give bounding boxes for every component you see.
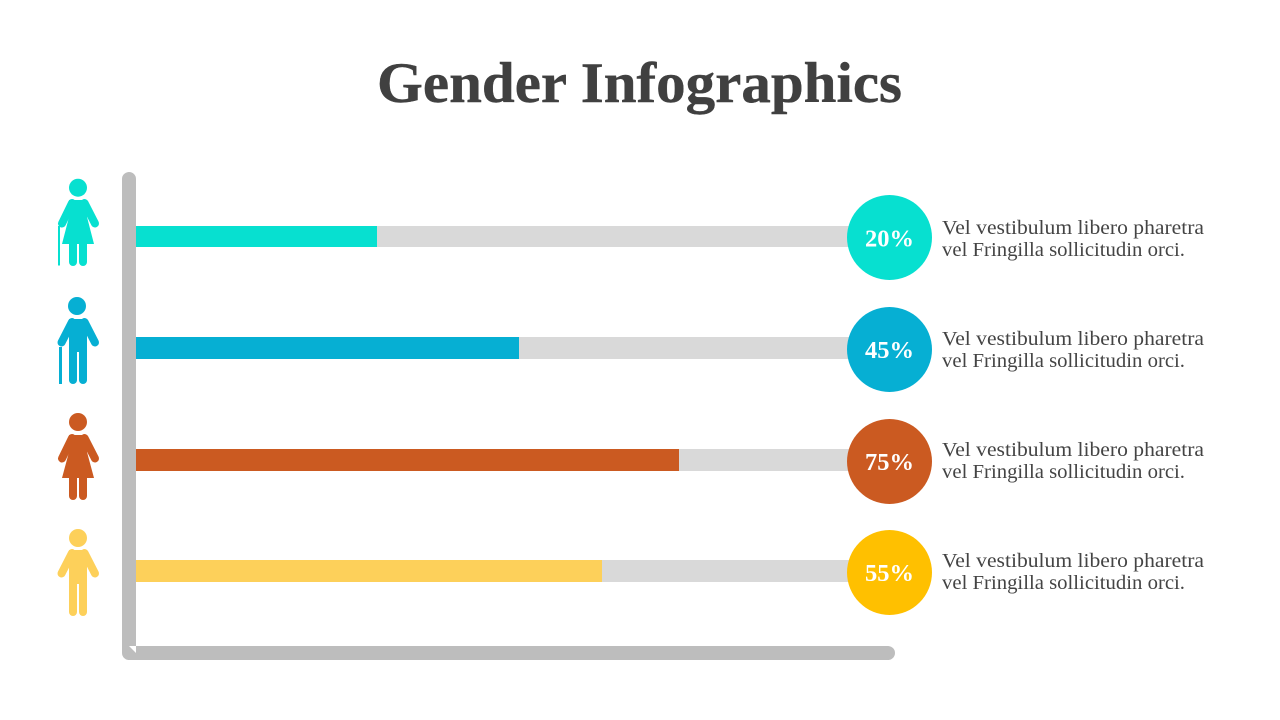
bar track: [136, 226, 850, 247]
description: Vel vestibulum libero pharetra: [942, 550, 1204, 572]
icon: elderly woman: [58, 179, 95, 266]
description: Vel vestibulum libero pharetra: [942, 217, 1204, 239]
percent circle: [847, 195, 932, 280]
percent label: 75%: [865, 450, 914, 476]
percent label: 20%: [865, 226, 914, 252]
row 2: elderly man 45%: [59, 297, 1204, 392]
row 4: man 55%: [62, 529, 1204, 616]
bar value: [136, 560, 602, 582]
bar track: [136, 337, 850, 359]
bar track: [136, 560, 850, 582]
percent label: 45%: [865, 338, 914, 364]
description: Vel vestibulum libero pharetra: [942, 439, 1204, 461]
bar track: [136, 449, 850, 471]
icon: man: [62, 529, 95, 616]
bar value: [136, 337, 519, 359]
row 3: woman 75%: [62, 413, 1204, 504]
description: vel Fringilla sollicitudin orci.: [942, 572, 1185, 594]
bar value: [136, 449, 679, 471]
description: Vel vestibulum libero pharetra: [942, 328, 1204, 350]
icon: woman: [62, 413, 95, 500]
percent label: 55%: [865, 561, 914, 587]
title: Gender Infographics: [377, 52, 902, 115]
description: vel Fringilla sollicitudin orci.: [942, 239, 1185, 261]
percent circle: [847, 307, 932, 392]
bar value: [136, 226, 377, 247]
icon: elderly man: [59, 297, 95, 384]
description: vel Fringilla sollicitudin orci.: [942, 350, 1185, 372]
description: vel Fringilla sollicitudin orci.: [942, 461, 1185, 483]
percent circle: [847, 530, 932, 615]
row 1: elderly woman 20%: [58, 179, 1204, 280]
chart axes: [129, 179, 888, 653]
percent circle: [847, 419, 932, 504]
